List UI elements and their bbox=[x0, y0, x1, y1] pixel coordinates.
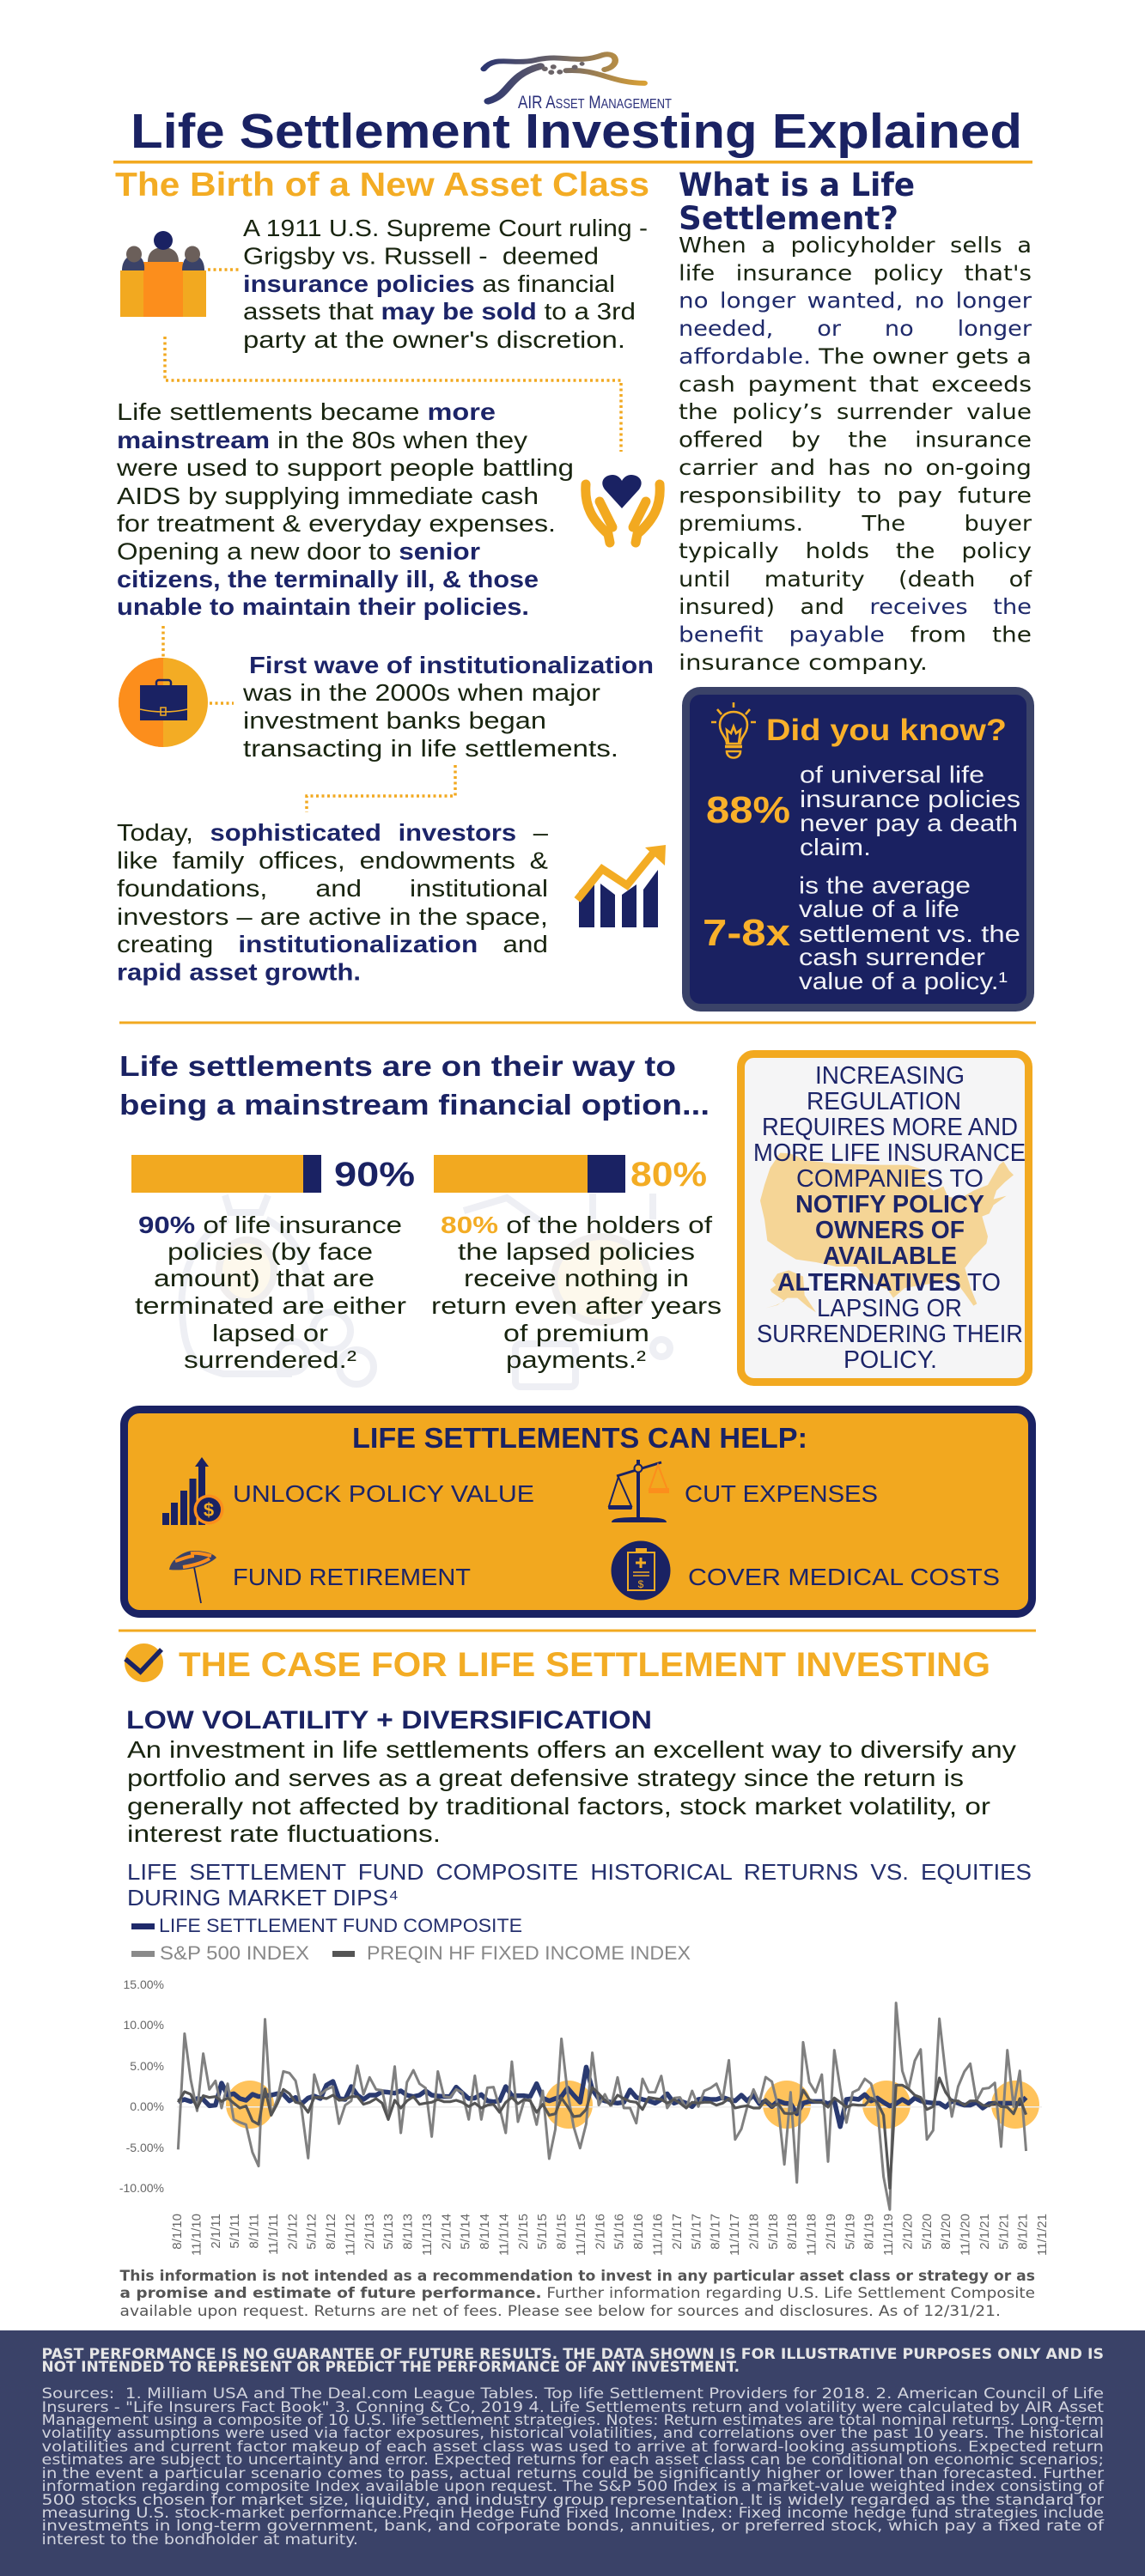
icon: beach umbrella bbox=[169, 1551, 216, 1603]
text block: sophisticated investors today: creating institutionalization and bbox=[117, 931, 548, 957]
icon: unlock policy value: $ bbox=[204, 1499, 214, 1521]
chart legend: S&P 500 INDEX bbox=[160, 1942, 309, 1964]
icon: court justices bbox=[120, 231, 206, 317]
chart: 90% progress bar bbox=[131, 1155, 415, 1194]
chart: 80% progress bar bbox=[434, 1155, 707, 1194]
chart x axis labels: 5/1/18 bbox=[766, 2214, 781, 2250]
chart y axis labels: -10.00% bbox=[119, 2181, 164, 2195]
chart y axis labels: 15.00% bbox=[124, 1978, 164, 1991]
text block: 90% of policies: 90% of life insurance bbox=[138, 1212, 402, 1238]
text block: diversification copy bbox=[127, 1736, 1016, 1847]
chart x axis labels: 11/1/16 bbox=[651, 2214, 665, 2256]
chart title: LIFE SETTLEMENT FUND COMPOSITE HISTORICAL RETURNS VS. EQUITIES bbox=[127, 1859, 1032, 1885]
chart x axis labels: 2/1/18 bbox=[746, 2214, 761, 2250]
text: sources: in the event a particular scenario comes to pass, actual returns could be significantly higher or lower than forecasted. Further bbox=[41, 2465, 1104, 2482]
text block: 80% of holders bbox=[431, 1212, 722, 1373]
text: sources: interest to the bondholder at maturity. bbox=[41, 2531, 358, 2549]
chart x axis labels: 8/1/13 bbox=[401, 2214, 416, 2250]
text block: life settlements in the 80s: Opening a new door to senior bbox=[117, 538, 480, 565]
text: sources: volatilities and current factor makeup of each asset class was used to arrive at forward-looking assumptions. Expected return bbox=[41, 2439, 1104, 2456]
chart x axis labels: 11/1/17 bbox=[728, 2214, 742, 2256]
text block: what is a life settlement: benefit payable from the bbox=[679, 623, 1032, 647]
text block: what is a life settlement: needed, or no longer bbox=[679, 316, 1032, 341]
text block: life settlements in the 80s: unable to maintain their policies. bbox=[117, 593, 529, 620]
chart x axis labels: 8/1/10 bbox=[170, 2214, 185, 2250]
stat: 88%: 88% bbox=[706, 789, 790, 831]
text block: life settlements in the 80s: AIDS by supplying immediate cash bbox=[117, 483, 539, 509]
heading: can help: LIFE SETTLEMENTS CAN HELP: bbox=[352, 1422, 807, 1454]
text block: diversification copy: An investment in life settlements offers an excellent way to diversify any bbox=[127, 1736, 1016, 1763]
text: sources: Management using a composite of 10 U.S. life settlement strategies. Notes: Return estimates are total nominal returns. Long-term bbox=[41, 2412, 1104, 2429]
chart x axis labels: 8/1/16 bbox=[631, 2214, 646, 2250]
chart x axis labels: 5/1/12 bbox=[305, 2214, 320, 2250]
chart x axis labels: 11/1/10 bbox=[189, 2214, 204, 2256]
text block: sophisticated investors today: Today, sophisticated investors – bbox=[117, 819, 548, 846]
text block: disclaimer bbox=[120, 2268, 1035, 2320]
text block: 90% of policies: amount) that are bbox=[154, 1265, 375, 1291]
chart legend: LIFE SETTLEMENT FUND COMPOSITE bbox=[159, 1915, 522, 1936]
text: sources: information regarding composite Index available upon request. The S&P 500 Index is a market-value weighted index consisting of bbox=[41, 2478, 1105, 2495]
text block: what is a life settlement: premiums. The buyer bbox=[679, 511, 1032, 536]
title: Life Settlement Investing Explained bbox=[131, 104, 1022, 159]
panel: life settlements can help bbox=[124, 1410, 1032, 1614]
text: 7-8x description: settlement vs. the bbox=[799, 920, 1020, 947]
text: cover medical costs: COVER MEDICAL COSTS bbox=[688, 1564, 1000, 1590]
text block: disclaimer: a promise and estimate of future performance. Further information regarding U.S. Life Settlement Composite bbox=[120, 2285, 1035, 2302]
text: regulation copy: LAPSING OR bbox=[817, 1295, 962, 1322]
text block: what is a life settlement: offered by the insurance bbox=[679, 428, 1032, 453]
icon: cut expenses scale bbox=[608, 1460, 669, 1522]
icon: unlock policy value bbox=[162, 1457, 223, 1525]
icon: US map bbox=[760, 1153, 1014, 1312]
text: regulation copy: AVAILABLE bbox=[823, 1242, 957, 1270]
logo: AIR Asset Management bbox=[484, 54, 672, 112]
chart x axis labels: 2/1/12 bbox=[285, 2214, 300, 2250]
stat: 80%: 80% bbox=[630, 1156, 707, 1194]
text block: disclaimer: This information is not intended as a recommendation to invest in any particular asset class or strategy or as bbox=[120, 2268, 1035, 2285]
chart y axis labels: -5.00% bbox=[126, 2141, 164, 2154]
text block: 1911 Supreme Court ruling: Grigsby vs. Russell - deemed bbox=[243, 242, 599, 270]
text: sources: volatility assumptions were used via factor exposures, historical volatilities, and correlations over the past 10 years. The historical bbox=[41, 2425, 1104, 2442]
heading: What is a Life Settlement?: What is a Life bbox=[679, 167, 915, 204]
chart x axis labels: 5/1/14 bbox=[459, 2214, 473, 2250]
chart x axis labels: 11/1/15 bbox=[574, 2214, 588, 2256]
text block: life settlements in the 80s: were used to support people battling bbox=[116, 454, 574, 481]
text block: 80% of holders: payments.² bbox=[506, 1346, 646, 1373]
icon: hands holding heart bbox=[586, 475, 660, 543]
icon: light bulb bbox=[711, 702, 756, 757]
text: unlock policy value: UNLOCK POLICY VALUE bbox=[233, 1480, 534, 1507]
text: past performance warning: PAST PERFORMANCE IS NO GUARANTEE OF FUTURE RESULTS. THE DATA SHOWN IS FOR ILLUSTRATIVE PURPOSES ONLY AND IS bbox=[41, 2346, 1104, 2363]
chart x axis labels: 11/1/20 bbox=[959, 2214, 973, 2256]
text: 88% description bbox=[800, 762, 1020, 860]
text block: 1911 Supreme Court ruling: party at the owner's discretion. bbox=[243, 326, 625, 353]
panel: increasing regulation callout bbox=[740, 1054, 1029, 1382]
icon: check mark badge bbox=[125, 1643, 163, 1682]
chart x axis labels: 5/1/11 bbox=[228, 2214, 242, 2249]
chart x axis labels: 5/1/20 bbox=[920, 2214, 935, 2250]
icon: briefcase in circle bbox=[119, 658, 208, 747]
chart: historical returns line chart bbox=[119, 1978, 1050, 2256]
chart: series lines bbox=[178, 2003, 1026, 2209]
chart x axis labels: 11/1/18 bbox=[804, 2214, 819, 2256]
heading: did you know: Did you know? bbox=[766, 714, 1007, 747]
chart x axis labels: 11/1/19 bbox=[881, 2214, 896, 2256]
chart x axis labels: 5/1/13 bbox=[381, 2214, 396, 2250]
text block: what is a life settlement: the policy’s surrender value bbox=[679, 399, 1032, 424]
text block: sophisticated investors today: like family offices, endowments & bbox=[117, 847, 548, 874]
chart x axis labels: 5/1/15 bbox=[535, 2214, 550, 2250]
text: regulation copy: SURRENDERING THEIR bbox=[757, 1321, 1023, 1348]
chart x axis labels: 2/1/16 bbox=[593, 2214, 607, 2250]
text block: life settlements in the 80s: Life settlements became more bbox=[117, 398, 496, 425]
text block: life settlements in the 80s bbox=[116, 398, 574, 620]
text block: what is a life settlement: typically holds the policy bbox=[679, 538, 1032, 563]
chart x axis labels: 2/1/14 bbox=[439, 2214, 454, 2250]
text block: what is a life settlement: no longer wanted, no longer bbox=[679, 289, 1032, 313]
text: 7-8x description: is the average bbox=[799, 872, 971, 899]
chart x axis labels: 8/1/15 bbox=[555, 2214, 569, 2250]
chart: market dip highlights bbox=[226, 2081, 1039, 2129]
icon: medical clipboard: $ bbox=[638, 1578, 644, 1590]
text: 7-8x description: value of a policy.¹ bbox=[799, 968, 1008, 994]
text block: sophisticated investors today: rapid asset growth. bbox=[117, 958, 361, 986]
text: sources: measuring U.S. stock-market performance.Preqin Hedge Fund Fixed Income Index: Fixed income hedge fund strategies include bbox=[41, 2505, 1104, 2522]
icon: rising bar chart with arrow bbox=[577, 845, 666, 927]
heading: low volatility + diversification: LOW VOLATILITY + DIVERSIFICATION bbox=[126, 1706, 652, 1735]
text block: life settlements in the 80s: citizens, the terminally ill, & those bbox=[117, 566, 539, 592]
chart x axis labels: 5/1/21 bbox=[996, 2214, 1011, 2250]
text: regulation copy: MORE LIFE INSURANCE bbox=[753, 1139, 1026, 1167]
stat: 7-8x: 7-8x bbox=[703, 912, 791, 954]
text block: what is a life settlement: responsibility to pay future bbox=[679, 483, 1032, 508]
chart x axis labels: 8/1/21 bbox=[1016, 2214, 1031, 2250]
text block: diversification copy: generally not affected by traditional factors, stock market volatility, or bbox=[127, 1793, 990, 1820]
text: 7-8x description: value of a life bbox=[799, 896, 959, 922]
heading: on their way to mainstream: being a mainstream financial option... bbox=[119, 1089, 710, 1121]
text: regulation copy: POLICY. bbox=[844, 1346, 937, 1374]
text: 88% description: claim. bbox=[800, 834, 871, 860]
text: 88% description: of universal life bbox=[800, 762, 984, 788]
chart y axis labels bbox=[119, 1978, 164, 2195]
chart x axis labels: 11/1/14 bbox=[496, 2214, 512, 2256]
chart x axis labels: 5/1/19 bbox=[843, 2214, 857, 2250]
text block: 90% of policies: policies (by face bbox=[167, 1238, 373, 1265]
logo wordmark: AIR ASSET MANAGEMENT bbox=[518, 93, 672, 112]
chart x axis labels: 11/1/11 bbox=[266, 2214, 281, 2255]
text block: what is a life settlement: life insurance policy that's bbox=[679, 260, 1032, 285]
text block: 80% of holders: receive nothing in bbox=[464, 1265, 689, 1291]
chart x axis labels: 2/1/11 bbox=[209, 2214, 223, 2249]
text block: diversification copy: portfolio and serves as a great defensive strategy since the return is bbox=[127, 1765, 964, 1791]
text: sources: estimates are subject to uncertainty and error. Expected returns for each asset class can be conditional on economic scenarios; bbox=[41, 2451, 1104, 2469]
chart x axis labels: 8/1/19 bbox=[862, 2214, 877, 2250]
text block: what is a life settlement: When a policyholder sells a bbox=[679, 233, 1032, 258]
chart x axis labels bbox=[170, 2214, 1050, 2256]
text block: life settlements in the 80s: mainstream in the 80s when they bbox=[117, 427, 527, 453]
text: regulation copy: OWNERS OF bbox=[815, 1217, 965, 1244]
text: regulation copy: NOTIFY POLICY bbox=[795, 1191, 984, 1218]
text: past performance warning: NOT INTENDED TO REPRESENT OR PREDICT THE PERFORMANCE OF ANY INVESTMENT. bbox=[41, 2359, 740, 2376]
text block: what is a life settlement: insured) and receives the bbox=[679, 594, 1032, 619]
text: regulation copy: REQUIRES MORE AND bbox=[762, 1114, 1018, 1141]
text: regulation copy: COMPANIES TO bbox=[796, 1165, 984, 1193]
panel: footer sources and disclosures bbox=[0, 2330, 1145, 2576]
text: 7-8x description: cash surrender bbox=[799, 944, 985, 970]
heading: The Birth of a New Asset Class: The Birth of a New Asset Class bbox=[115, 167, 649, 204]
text: 7-8x description bbox=[799, 872, 1020, 994]
chart x axis labels: 8/1/18 bbox=[785, 2214, 800, 2250]
text: 88% description: never pay a death bbox=[800, 810, 1018, 836]
text block: life settlements in the 80s: for treatment & everyday expenses. bbox=[117, 510, 556, 537]
text block: sophisticated investors today: foundations, and institutional bbox=[117, 875, 548, 902]
text block: what is a life settlement: carrier and has no on-going bbox=[679, 455, 1032, 480]
chart y axis labels: 0.00% bbox=[130, 2099, 164, 2113]
text: regulation copy: ALTERNATIVES TO bbox=[777, 1269, 1001, 1297]
chart x axis labels: 8/1/12 bbox=[324, 2214, 338, 2250]
text block: diversification copy: interest rate fluctuations. bbox=[127, 1820, 441, 1847]
chart x axis labels: 8/1/17 bbox=[709, 2214, 723, 2250]
heading: on their way to mainstream: Life settlements are on their way to bbox=[119, 1050, 676, 1082]
text: sources: Insurers - "Life Insurers Fact Book" 3. Conning & Co, 2019 4. Life Settlements return and volatility were calculated by AIR Asset bbox=[41, 2399, 1104, 2416]
chart x axis labels: 5/1/17 bbox=[689, 2214, 703, 2250]
text: cut expenses: CUT EXPENSES bbox=[685, 1480, 878, 1507]
icon: cheetah mark bbox=[484, 54, 644, 101]
text block: first wave of institutionalization: investment banks began bbox=[243, 708, 546, 733]
text block: 80% of holders: return even after years bbox=[431, 1292, 722, 1319]
text block: 80% of holders: of premium bbox=[503, 1320, 649, 1346]
text block: 90% of policies: lapsed or bbox=[212, 1320, 328, 1346]
text block: sophisticated investors today: investors – are active in the space, bbox=[117, 903, 548, 930]
chart legend: PREQIN HF FIXED INCOME INDEX bbox=[367, 1942, 691, 1964]
chart x axis labels: 2/1/13 bbox=[362, 2214, 377, 2250]
chart x axis labels: 2/1/15 bbox=[516, 2214, 531, 2250]
text block: 1911 Supreme Court ruling: assets that may be sold to a 3rd bbox=[243, 298, 636, 325]
chart x axis labels: 8/1/14 bbox=[478, 2214, 492, 2250]
text block: 1911 Supreme Court ruling: A 1911 U.S. Supreme Court ruling - bbox=[243, 215, 648, 241]
chart x axis labels: 11/1/12 bbox=[343, 2214, 357, 2256]
heading: What is a Life Settlement? bbox=[679, 167, 915, 237]
chart title: DURING MARKET DIPS⁴ bbox=[127, 1885, 399, 1911]
text block: 1911 Supreme Court ruling: insurance policies as financial bbox=[243, 270, 615, 297]
chart x axis labels: 2/1/19 bbox=[824, 2214, 838, 2250]
text: fund retirement: FUND RETIREMENT bbox=[233, 1564, 471, 1590]
heading: What is a Life Settlement?: Settlement? bbox=[679, 200, 898, 237]
text block: first wave of institutionalization bbox=[242, 652, 654, 762]
chart x axis labels: 8/1/11 bbox=[247, 2214, 261, 2249]
chart x axis labels: 11/1/21 bbox=[1035, 2214, 1050, 2256]
text block: 80% of holders: the lapsed policies bbox=[458, 1238, 695, 1265]
chart x axis labels: 2/1/17 bbox=[670, 2214, 685, 2250]
text: regulation copy bbox=[753, 1062, 1026, 1374]
panel: did you know bbox=[685, 690, 1031, 1008]
icon: medical clipboard bbox=[612, 1540, 670, 1601]
chart x axis labels: 2/1/20 bbox=[900, 2214, 915, 2250]
text: sources: Sources: 1. Milliam USA and The Deal.com League Tables. Top life Settlement Providers for 2018. 2. American Council of Life bbox=[41, 2385, 1104, 2403]
chart y axis labels: 10.00% bbox=[124, 2018, 164, 2032]
text block: 90% of policies: terminated are either bbox=[135, 1292, 406, 1319]
heading: on their way to mainstream bbox=[119, 1050, 710, 1121]
chart title bbox=[127, 1859, 1032, 1911]
text block: 1911 Supreme Court ruling bbox=[243, 215, 648, 353]
watermark: faint money icons bbox=[181, 1194, 670, 1387]
text: sources: 500 stocks chosen for market size, liquidity, and industry group representation. It is widely regarded as the standard for bbox=[41, 2492, 1104, 2509]
text block: what is a life settlement: affordable. The owner gets a bbox=[679, 343, 1032, 369]
chart x axis labels: 5/1/16 bbox=[612, 2214, 627, 2250]
chart x axis labels: 2/1/21 bbox=[978, 2214, 992, 2250]
text block: sophisticated investors today bbox=[117, 819, 548, 986]
text block: what is a life settlement: until maturity (death of bbox=[679, 567, 1032, 592]
text block: 80% of holders: 80% of the holders of bbox=[441, 1212, 712, 1238]
text block: what is a life settlement: cash payment that exceeds bbox=[679, 372, 1032, 397]
text block: first wave of institutionalization: was in the 2000s when major bbox=[242, 679, 600, 706]
text block: what is a life settlement: insurance company. bbox=[679, 650, 928, 675]
text: sources bbox=[41, 2385, 1105, 2549]
text block: first wave of institutionalization: First wave of institutionalization bbox=[249, 652, 654, 678]
text block: 90% of policies bbox=[135, 1212, 406, 1373]
text: past performance warning bbox=[41, 2346, 1104, 2376]
chart x axis labels: 11/1/13 bbox=[420, 2214, 435, 2256]
chart x axis labels: 8/1/20 bbox=[939, 2214, 953, 2250]
text block: what is a life settlement bbox=[679, 233, 1032, 675]
text block: disclaimer: available upon request. Returns are net of fees. Please see below for sources and disclosures. As of 12/31/21. bbox=[120, 2303, 1001, 2320]
chart legend bbox=[131, 1915, 691, 1964]
text: 88% description: insurance policies bbox=[800, 786, 1020, 812]
text: regulation copy: INCREASING bbox=[815, 1062, 965, 1090]
stat: 90%: 90% bbox=[334, 1156, 415, 1194]
heading: the case for life settlement investing: THE CASE FOR LIFE SETTLEMENT INVESTING bbox=[179, 1646, 990, 1684]
text block: 90% of policies: surrendered.² bbox=[184, 1346, 356, 1373]
chart y axis labels: 5.00% bbox=[130, 2059, 164, 2073]
text: sources: investments in long-term government, bank, and corporate bonds, annuities, or preferred stock, which pay a fixed rate of bbox=[41, 2518, 1105, 2535]
text: regulation copy: REGULATION bbox=[807, 1088, 961, 1115]
text block: first wave of institutionalization: transacting in life settlements. bbox=[243, 735, 618, 762]
